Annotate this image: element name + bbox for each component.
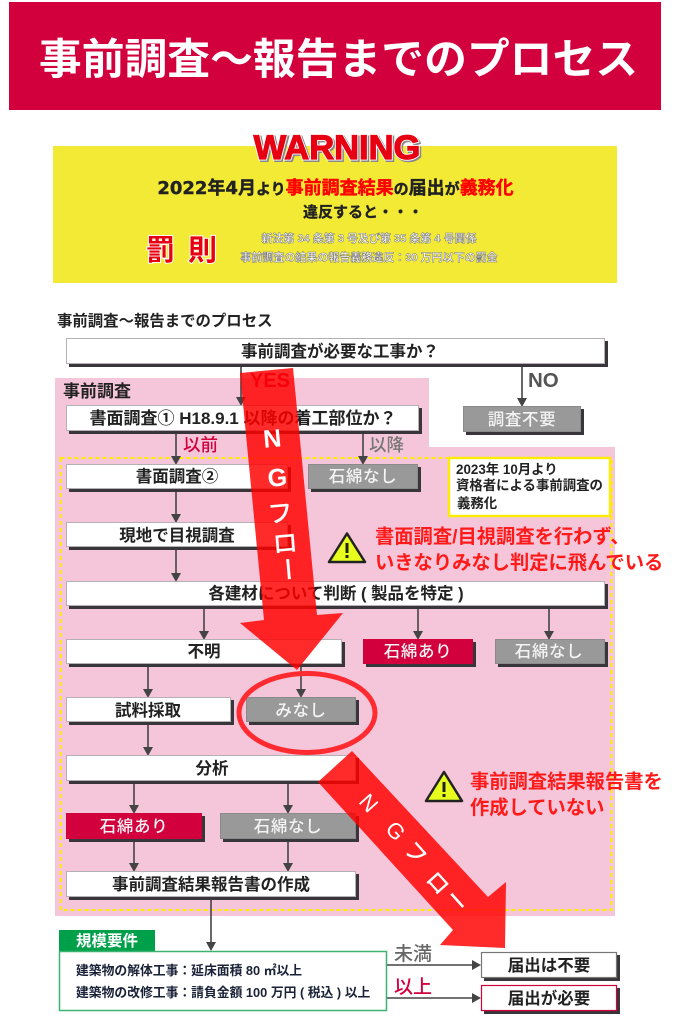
arrow: NG flow two: ロ <box>421 866 454 900</box>
arrow: NG flow one: ー <box>272 556 302 583</box>
callout: skipped survey: 書面調査/目視調査を行わず、 <box>375 525 630 548</box>
arrow: NG flow one <box>240 368 343 670</box>
box: analysis: 分析 <box>196 758 229 778</box>
warning heading: WARNING <box>254 129 420 167</box>
branch label: yes: YES <box>250 370 290 392</box>
box: on-site visual survey: 現地で目視調査 <box>119 526 235 545</box>
box: deemed <box>246 698 359 725</box>
icon: warning triangle lower <box>426 772 462 801</box>
box: unknown: 不明 <box>188 643 220 661</box>
requirements tab: 規模要件 <box>76 932 138 950</box>
panel: preliminary survey background <box>55 378 615 916</box>
note: qualification requirement <box>449 458 610 516</box>
arrow: NG flow two <box>318 751 506 948</box>
penalty details: 新法第 34 条第 3 号及び第 35 条第 4 号関係 <box>261 231 477 245</box>
connector arrows <box>129 364 554 1003</box>
box: create report <box>66 872 359 900</box>
box: asbestos present: 石綿あり <box>384 642 452 661</box>
box: survey needed question <box>66 338 608 367</box>
box: asbestos absent after analysis <box>220 814 359 842</box>
warning heading: WARNING <box>254 129 420 167</box>
box: deemed: みなし <box>275 701 327 720</box>
note: qualification requirement: 資格者による事前調査の <box>456 477 603 493</box>
box: asbestos absent: 石綿なし <box>515 642 583 661</box>
arrow: NG flow one: N <box>262 424 283 454</box>
box: asbestos present <box>363 639 476 667</box>
violation lead-in: 違反すると・・・ <box>303 203 423 221</box>
box: create report: 事前調査結果報告書の作成 <box>112 874 310 894</box>
box: unknown <box>66 640 345 667</box>
branch label: below threshold: 未満 <box>394 943 432 965</box>
panel: warning <box>53 129 617 283</box>
penalty heading <box>146 235 217 267</box>
penalty details <box>240 231 498 264</box>
box: survey not needed: 調査不要 <box>488 410 556 429</box>
box: document survey 1: 書面調査① H18.9.1 以降の着工部位か？ <box>90 408 396 428</box>
box: analysis <box>66 756 359 784</box>
box: asbestos absent after analysis: 石綿なし <box>254 817 322 836</box>
penalty heading: 罰 <box>146 235 175 267</box>
arrow: NG flow two: N <box>354 789 383 817</box>
callout: skipped survey <box>375 525 663 574</box>
box: asbestos present after analysis <box>66 813 205 842</box>
requirements tab <box>59 930 155 952</box>
penalty details: 事前調査の結果の報告義務違反：30 万円以下の罰金 <box>240 250 498 264</box>
box: document survey 2 <box>66 464 291 492</box>
box: notification needed <box>482 986 620 1014</box>
demolition requirement: 建築物の解体工事：延床面積 80 ㎡以上 <box>76 963 302 978</box>
title banner <box>9 2 661 110</box>
note: qualification requirement: 2023年 10月より <box>456 461 558 477</box>
branch label: before: 以前 <box>183 435 218 455</box>
box: sampling <box>66 698 234 725</box>
penalty heading: 則 <box>188 235 217 267</box>
branch label: above threshold: 以上 <box>394 976 432 998</box>
box: no asbestos after date: 石綿なし <box>329 467 397 486</box>
arrow: NG flow one: G <box>266 463 288 493</box>
box: asbestos absent <box>496 640 608 667</box>
arrow: NG flow two: G <box>381 816 411 846</box>
box: no asbestos after date <box>308 464 421 492</box>
preliminary survey label: 事前調査 <box>63 382 131 401</box>
box: asbestos present after analysis: 石綿あり <box>100 817 168 836</box>
highlight ellipse around deemed <box>239 674 375 752</box>
callout: skipped survey: いきなりみなし判定に飛んでいる <box>375 552 663 574</box>
title banner: 事前調査〜報告までのプロセス <box>39 36 638 84</box>
box: material judgement <box>66 582 608 609</box>
box: notification not needed: 届出は不要 <box>508 956 590 975</box>
box: on-site visual survey <box>66 522 291 550</box>
renovation requirement: 建築物の改修工事：請負金額 100 万円 ( 税込 ) 以上 <box>76 985 371 1000</box>
box: survey not needed <box>464 406 584 435</box>
panel: scale requirements <box>59 930 386 1010</box>
callout: report not created <box>470 770 663 819</box>
note: qualification requirement: 義務化 <box>457 495 498 511</box>
branch label: after: 以降 <box>369 435 404 455</box>
box: document survey 2: 書面調査② <box>136 466 219 486</box>
dashed qualified-person area <box>60 458 612 910</box>
box: notification not needed <box>482 952 620 981</box>
obligation statement: 2022年4月より事前調査結果の届出が義務化 <box>157 177 514 199</box>
callout: report not created: 事前調査結果報告書を <box>470 770 663 793</box>
arrow: NG flow two: フ <box>399 836 432 870</box>
box: survey needed question: 事前調査が必要な工事か？ <box>241 341 439 361</box>
arrow: NG flow one: フ <box>267 499 294 529</box>
process heading: 事前調査〜報告までのプロセス <box>57 311 272 330</box>
icon: warning triangle upper <box>329 534 365 562</box>
box: document survey 1 <box>66 406 422 434</box>
callout: report not created: 作成していない <box>470 796 604 819</box>
box: sampling: 試料採取 <box>115 701 182 720</box>
branch label: no: NO <box>528 369 559 392</box>
box: material judgement: 各建材について判断 ( 製品を特定 ) <box>208 583 464 603</box>
warning heading: WARNING <box>255 130 422 168</box>
arrow: NG flow two: ー <box>440 884 473 918</box>
box: notification needed: 届出が必要 <box>508 988 590 1008</box>
arrow: NG flow one: ロ <box>272 529 299 559</box>
